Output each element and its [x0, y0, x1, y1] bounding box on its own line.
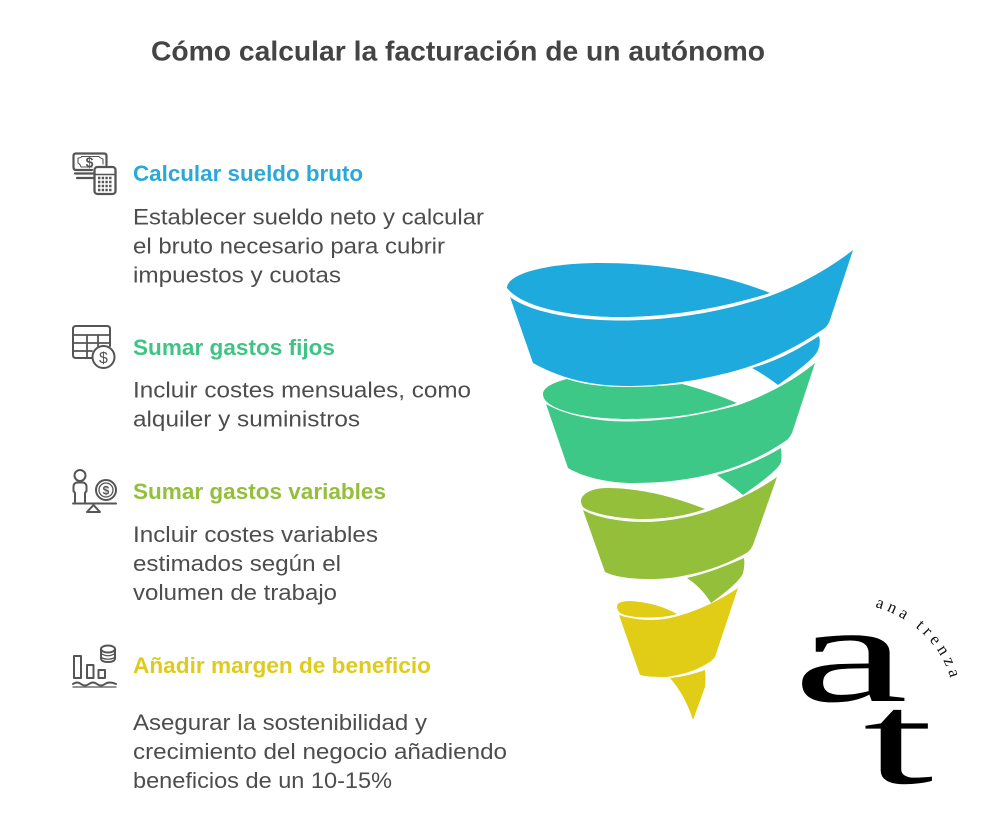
logo curved wordmark: ana trenza	[876, 600, 958, 678]
description	[133, 378, 471, 432]
panel: añadir margen de beneficio	[73, 646, 507, 793]
description: impuestos y cuotas	[133, 262, 341, 288]
funnel chart	[507, 250, 853, 720]
description: el bruto necesario para cubrir	[133, 234, 445, 258]
funnel tier: green	[543, 363, 815, 495]
description	[133, 710, 507, 793]
description: volumen de trabajo	[133, 580, 337, 605]
description: Incluir costes variables	[133, 522, 378, 547]
icon: banknotes and calculator: $	[86, 154, 94, 170]
description: Establecer sueldo neto y calcular	[133, 204, 484, 230]
heading: Sumar gastos fijos	[133, 335, 335, 360]
funnel tier: yellow	[617, 588, 738, 720]
heading: Sumar gastos variables	[133, 479, 386, 504]
funnel tier: blue	[507, 250, 853, 386]
description: Incluir costes mensuales, como	[133, 378, 471, 402]
heading: Añadir margen de beneficio	[133, 653, 431, 678]
icon: balance with person and coin: $	[103, 484, 110, 498]
logo: ana trenza	[793, 577, 958, 811]
heading: Calcular sueldo bruto	[133, 161, 363, 186]
panel: sumar gastos variables	[73, 470, 386, 605]
panel: calcular sueldo bruto	[74, 154, 484, 288]
icon: banknotes and calculator	[74, 154, 116, 194]
description: crecimiento del negocio añadiendo	[133, 739, 507, 764]
description: alquiler y suministros	[133, 406, 360, 432]
description: estimados según el	[133, 551, 341, 576]
logo letter t: t	[863, 667, 933, 811]
icon: balance with person and coin	[73, 470, 116, 512]
panel: sumar gastos fijos	[73, 326, 471, 432]
description: beneficios de un 10-15%	[133, 768, 392, 793]
funnel tier: olive	[581, 477, 777, 603]
logo letter a: a	[793, 577, 908, 732]
title: Cómo calcular la facturación de un autónomo	[151, 36, 765, 66]
icon: table with dollar coin	[73, 326, 114, 368]
description	[133, 204, 484, 288]
description	[133, 522, 378, 605]
icon: bars, coins and waves	[73, 646, 116, 687]
icon: table with dollar coin: $	[99, 350, 108, 367]
description: Asegurar la sostenibilidad y	[133, 710, 427, 735]
